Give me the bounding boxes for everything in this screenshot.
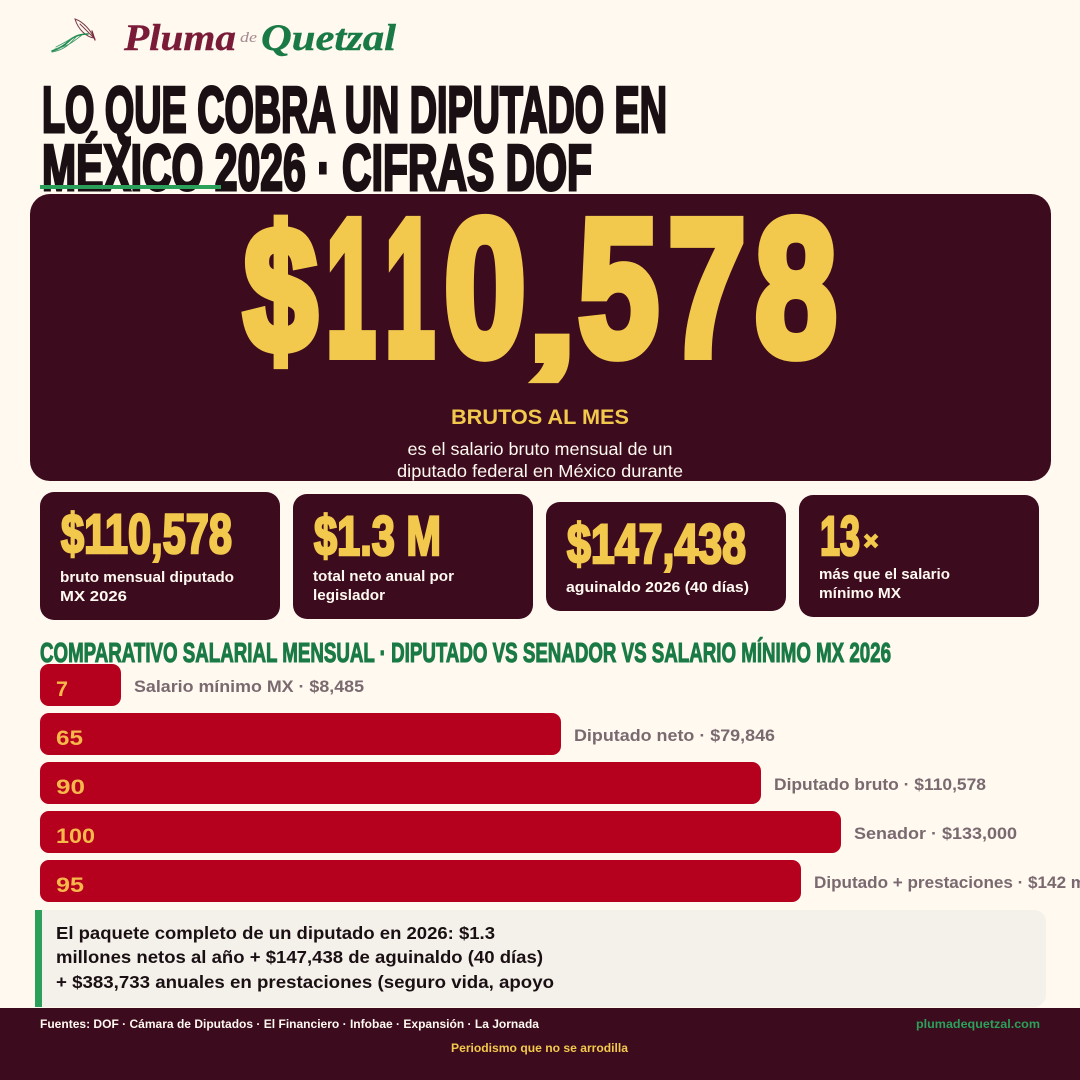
multiplier sign: × bbox=[864, 528, 878, 555]
hero unit: BRUTOS AL MES bbox=[451, 406, 629, 429]
bar: salario mínimo bbox=[40, 664, 364, 706]
bar: diputado bruto: 90 bbox=[56, 776, 85, 799]
icon: quetzal feather bbox=[52, 19, 95, 52]
stat label: legislador bbox=[313, 587, 385, 604]
hero number: , bbox=[530, 240, 574, 386]
title: MÉXICO 2026 · CIFRAS DOF bbox=[42, 131, 592, 204]
bar: diputado neto: 65 bbox=[56, 727, 83, 750]
stat label: más que el salario bbox=[819, 566, 950, 583]
bar: diputado más prestaciones: 95 bbox=[56, 874, 84, 897]
hero number: $ bbox=[244, 191, 317, 389]
stat value: $147,438 bbox=[567, 512, 746, 575]
hero number: 1 bbox=[385, 179, 435, 397]
hero number bbox=[244, 179, 837, 397]
stat value: $1.3 M bbox=[314, 504, 441, 567]
panel: stat card veces salario bbox=[799, 495, 1039, 617]
site url: plumadequetzal.com bbox=[916, 1019, 1040, 1031]
bar: senador: Senador · $133,000 bbox=[854, 824, 1017, 843]
stat label bbox=[819, 566, 950, 602]
callout text: El paquete completo de un diputado en 2026: $1.3 bbox=[56, 923, 495, 943]
stat label bbox=[60, 569, 234, 605]
title underline bbox=[40, 185, 221, 189]
tagline: Periodismo que no se arrodilla bbox=[451, 1043, 629, 1055]
stat label: MX 2026 bbox=[60, 588, 127, 605]
bar: senador: 100 bbox=[56, 825, 95, 848]
hero description: es el salario bruto mensual de un bbox=[408, 439, 672, 459]
bar: diputado neto: Diputado neto · $79,846 bbox=[574, 726, 775, 745]
stat label bbox=[313, 568, 454, 604]
bar: diputado más prestaciones: Diputado + prestaciones · $142 m bbox=[814, 873, 1080, 892]
callout text bbox=[56, 923, 554, 992]
bar: diputado bruto: Diputado bruto · $110,578 bbox=[774, 775, 986, 794]
panel: stat card bruto mensual bbox=[40, 492, 280, 620]
bar chart bbox=[40, 664, 1080, 902]
wordmark: Quetzal bbox=[261, 18, 397, 59]
logo bbox=[52, 18, 397, 59]
hero number: 0 bbox=[444, 179, 526, 397]
bar: salario mínimo: Salario mínimo MX · $8,485 bbox=[134, 677, 364, 696]
panel: hero figure bbox=[30, 179, 1051, 481]
stat label: total neto anual por bbox=[313, 568, 454, 585]
panel: stat card aguinaldo bbox=[546, 502, 786, 611]
bar: senador bbox=[40, 811, 1017, 853]
bar: diputado neto bbox=[40, 713, 775, 755]
hero number: 7 bbox=[668, 179, 746, 397]
stat label: bruto mensual diputado bbox=[60, 569, 234, 586]
bar: diputado bruto bbox=[40, 762, 986, 804]
hero number: 5 bbox=[578, 179, 659, 397]
hero description bbox=[397, 439, 683, 481]
stat label: aguinaldo 2026 (40 días) bbox=[566, 579, 749, 596]
bar: diputado más prestaciones bbox=[40, 860, 1080, 902]
hero description: diputado federal en México durante bbox=[397, 461, 683, 481]
callout text: millones netos al año + $147,438 de aguinaldo (40 días) bbox=[56, 947, 543, 967]
stat label: mínimo MX bbox=[819, 585, 901, 602]
stat value: 13 bbox=[820, 504, 860, 567]
bar: salario mínimo: 7 bbox=[56, 678, 68, 701]
title bbox=[42, 73, 667, 204]
panel: stat card neto anual bbox=[293, 494, 533, 619]
stat value: $110,578 bbox=[61, 502, 232, 565]
wordmark bbox=[123, 18, 397, 59]
callout bbox=[35, 910, 1046, 1007]
hero number: 8 bbox=[755, 179, 837, 397]
sources: Fuentes: DOF · Cámara de Diputados · El Financiero · Infobae · Expansión · La Jornada bbox=[40, 1019, 540, 1031]
wordmark: Pluma bbox=[123, 18, 236, 59]
hero number: 1 bbox=[326, 179, 376, 397]
footer bbox=[0, 1008, 1080, 1080]
wordmark: de bbox=[240, 30, 257, 46]
callout text: + $383,733 anuales en prestaciones (seguro vida, apoyo bbox=[56, 972, 554, 992]
